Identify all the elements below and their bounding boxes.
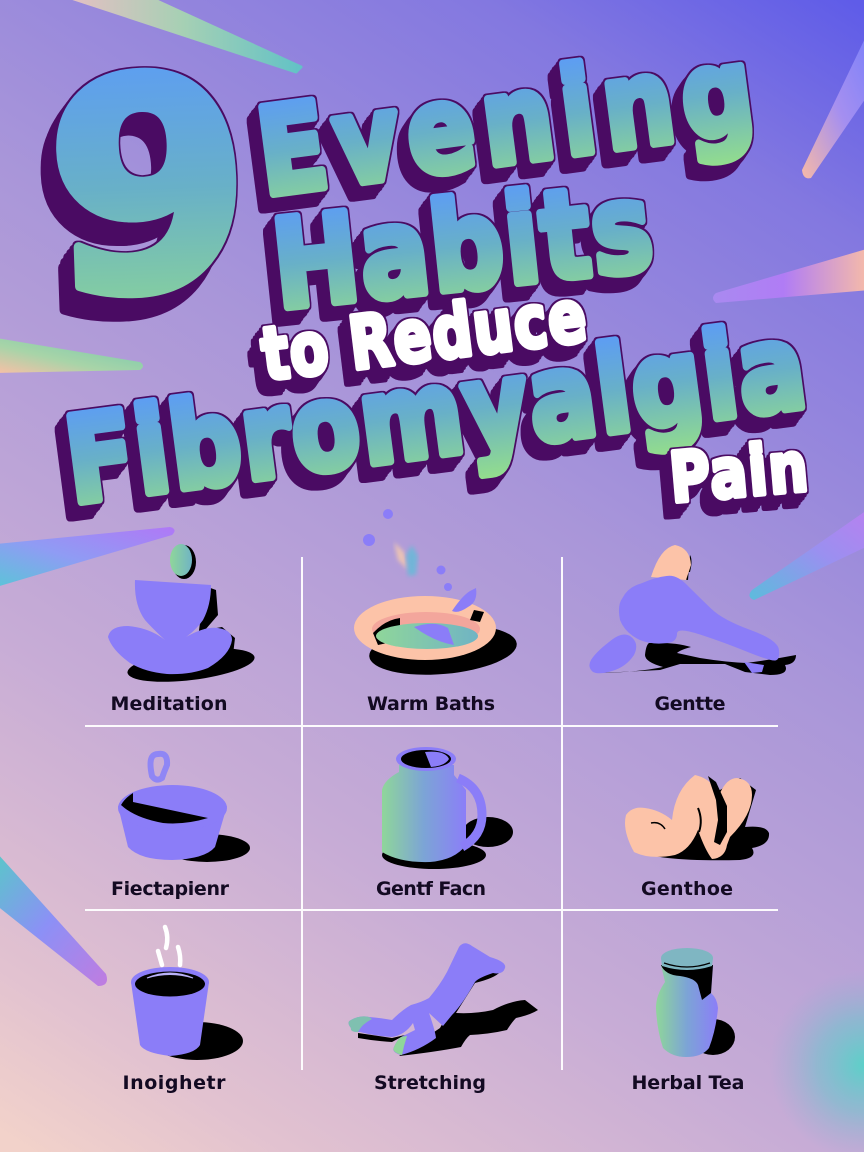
habit: Warm Baths — [354, 509, 519, 715]
habit: Fiectapienr — [111, 754, 250, 900]
label: Warm Baths: Warm Baths — [367, 693, 495, 715]
label: Stretching: Stretching — [374, 1072, 486, 1094]
icon: folded peach figure — [625, 775, 769, 860]
grid lines — [85, 557, 778, 1070]
title line: Fibromyalgia: Fibromyalgia — [58, 297, 813, 531]
icon: gradient mug — [382, 747, 513, 869]
habit: Gentf Facn — [376, 747, 513, 900]
icon: kneeling stretch figure — [589, 545, 796, 675]
label: Inoighetr: Inoighetr — [122, 1072, 226, 1094]
habit: Genthoe — [625, 775, 769, 900]
habit: Stretching — [348, 943, 538, 1094]
title — [42, 14, 813, 531]
title numeral 9: 9 — [42, 14, 256, 361]
title line: Evening: Evening — [250, 20, 762, 224]
icon: stretching leg figure — [348, 943, 538, 1056]
label: Gentte: Gentte — [654, 693, 726, 715]
icon: herbal tea jar — [656, 948, 735, 1057]
icon: warm bath tub — [354, 509, 519, 680]
title line: Habits: Habits — [266, 155, 659, 337]
habit: Herbal Tea — [632, 948, 744, 1094]
label: Genthoe: Genthoe — [641, 878, 733, 900]
label: Meditation: Meditation — [110, 693, 228, 715]
icon: cup with steam — [131, 927, 243, 1060]
label: Fiectapienr: Fiectapienr — [111, 878, 230, 900]
habit: Meditation — [108, 544, 256, 715]
title line: to Reduce: to Reduce — [257, 275, 591, 398]
habit: Inoighetr — [122, 927, 243, 1094]
label: Herbal Tea: Herbal Tea — [632, 1072, 744, 1094]
icon: bowl with steam — [118, 754, 250, 862]
title line: Pain: Pain — [666, 426, 811, 519]
habit: Gentle stretch — [589, 545, 796, 715]
label: Gentf Facn: Gentf Facn — [376, 878, 486, 900]
icon: seated meditation figure — [108, 544, 256, 688]
